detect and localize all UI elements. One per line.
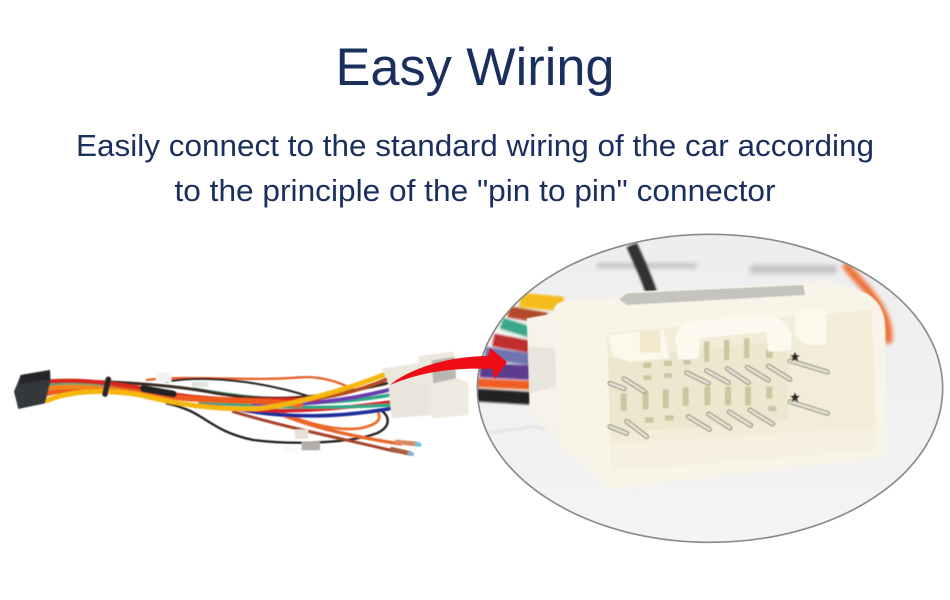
lens background xyxy=(477,234,943,542)
description text xyxy=(76,128,874,208)
pin block xyxy=(608,340,788,433)
connector left flange xyxy=(526,314,558,432)
metal pins xyxy=(610,361,827,437)
lens border xyxy=(477,234,943,542)
block slots xyxy=(621,338,776,423)
magnified connector lens xyxy=(470,234,943,542)
thin loose wires xyxy=(147,377,400,452)
top key tabs xyxy=(608,310,827,362)
description text: to the principle of the "pin to pin" connector xyxy=(174,173,776,208)
wiring harness photo xyxy=(14,352,468,454)
cable tie xyxy=(105,379,108,394)
cavity xyxy=(607,310,876,446)
star pin tips xyxy=(790,352,800,402)
grey label xyxy=(619,285,805,305)
connector body xyxy=(553,279,887,488)
wire tags xyxy=(156,373,320,454)
latch clip xyxy=(675,315,792,359)
red arrow xyxy=(390,348,507,385)
main wire bundle xyxy=(47,375,392,416)
black 16-pin plug xyxy=(14,370,51,409)
blurred black wire xyxy=(632,245,652,293)
blurred background objects xyxy=(597,263,888,340)
title: Easy Wiring xyxy=(336,38,614,97)
connector xyxy=(527,279,887,488)
wire terminals xyxy=(392,442,419,454)
description text: Easily connect to the standard wiring of the car according xyxy=(76,128,874,163)
white plug xyxy=(382,352,468,418)
wires behind connector xyxy=(477,300,563,398)
